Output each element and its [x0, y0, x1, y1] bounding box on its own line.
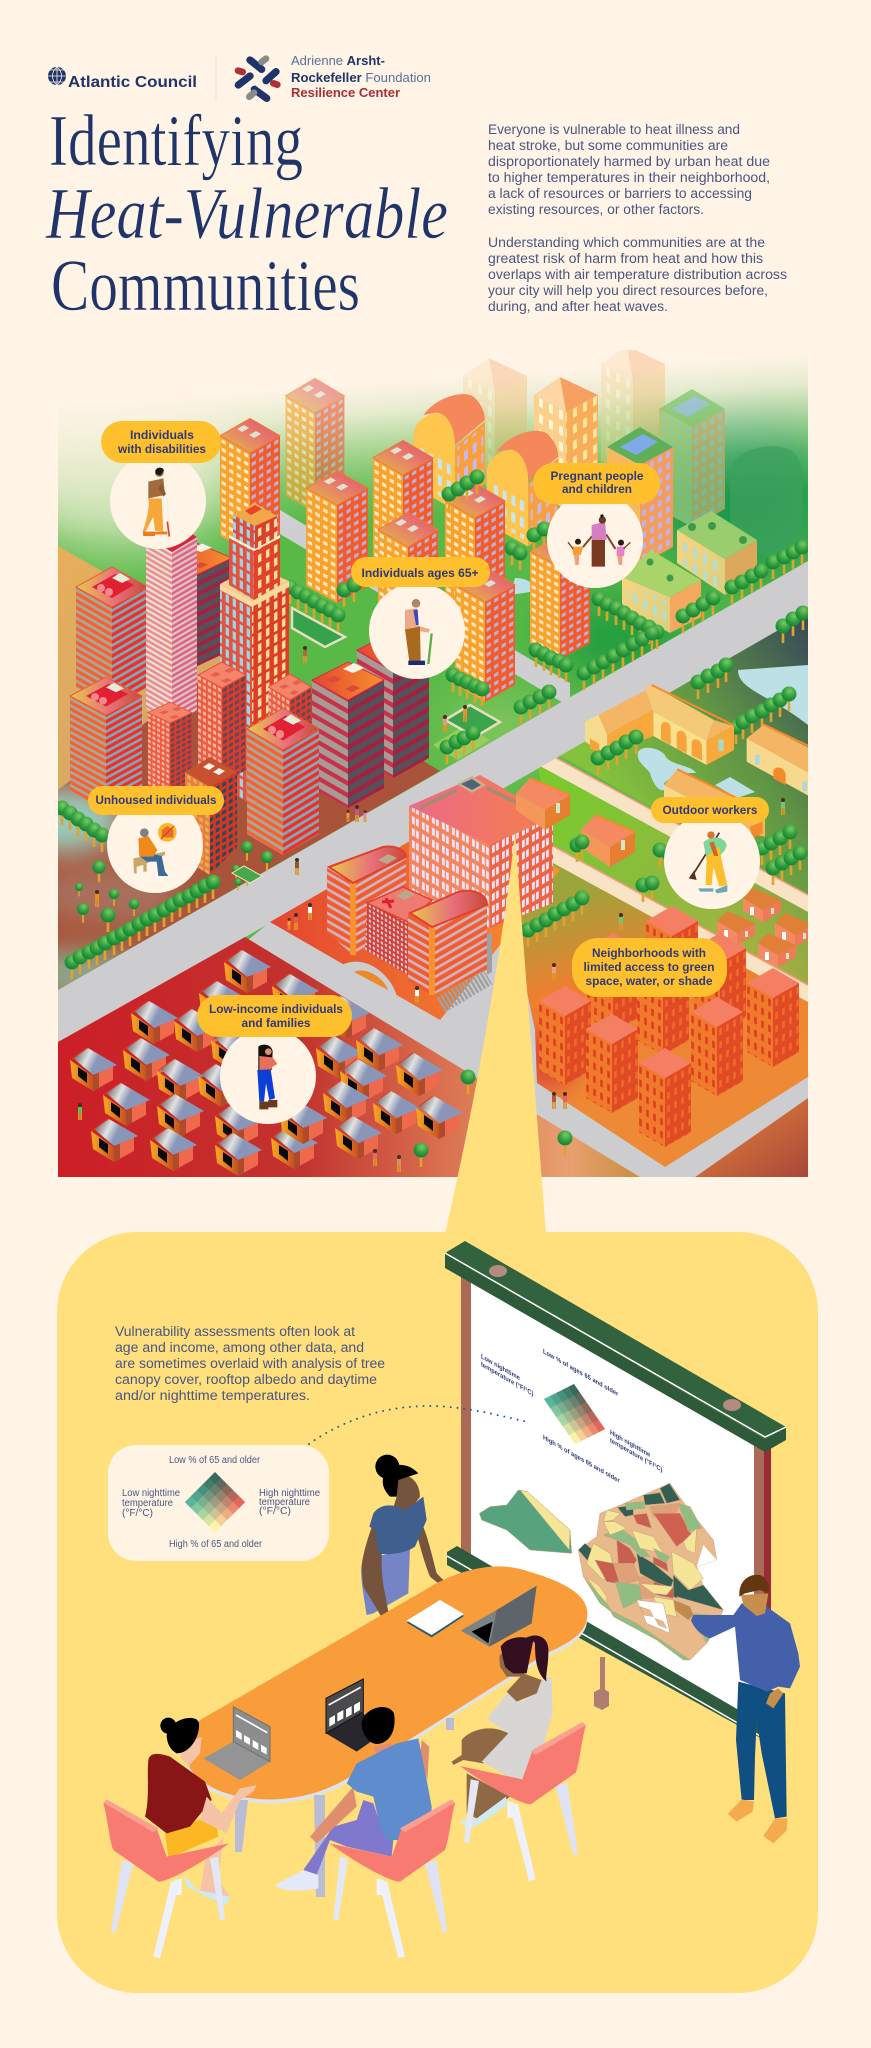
screen legend: temperature (°F/°C) — [481, 1360, 533, 1398]
legend card: temperature — [122, 1498, 173, 1509]
bottom right ground — [688, 1098, 808, 1177]
callout: low-income individuals and families: and families — [242, 1016, 311, 1030]
callout: limited access neighborhoods: space, water, or shade — [586, 974, 713, 988]
dotted connector — [309, 1406, 528, 1444]
laptop: grey — [203, 1707, 270, 1780]
legend card: (°F/°C) — [259, 1506, 291, 1517]
low-income block ground — [58, 937, 640, 1177]
projection screen — [445, 1241, 786, 1742]
table legs — [235, 1718, 454, 1897]
skyscraper — [220, 590, 252, 805]
screen base bar — [447, 1546, 768, 1742]
screen legend — [481, 1348, 662, 1485]
top bar front — [445, 1253, 786, 1452]
title: Communities — [51, 245, 360, 326]
green courtyard — [292, 608, 345, 647]
green block small — [433, 729, 490, 760]
hospital — [327, 775, 553, 1005]
apartment blocks — [460, 906, 799, 1155]
water — [510, 578, 808, 798]
screen rear leg — [594, 1657, 609, 1710]
back row buildings, hazed by distance — [286, 346, 803, 560]
legend card: High nighttime — [259, 1488, 320, 1499]
callout: low-income individuals and families — [197, 995, 352, 1124]
base bar highlight — [447, 1556, 762, 1737]
callout: unhoused individuals: Unhoused individuals — [96, 793, 217, 807]
intro text: Everyone is vulnerable to heat illness and — [488, 122, 740, 137]
callout: unhoused individuals — [88, 786, 224, 893]
screen maps — [479, 1483, 723, 1660]
intro text: to higher temperatures in their neighborhood, — [488, 170, 770, 185]
back street — [280, 510, 570, 707]
panel text: Vulnerability assessments often look at — [115, 1324, 355, 1339]
villas and houses — [516, 685, 813, 967]
right-of-road dark ground — [560, 618, 808, 894]
seated people, chairs and laptops — [103, 1586, 586, 1958]
logo: Arsht-Rockefeller Foundation Resilience Center — [216, 53, 431, 101]
figure: mother with two children — [568, 514, 630, 567]
tan ground left — [58, 546, 220, 790]
callout: limited access neighborhoods — [572, 938, 727, 997]
intro text: a lack of resources or barriers to accessing — [488, 186, 752, 201]
orange towers — [220, 418, 590, 702]
cream path lower — [553, 846, 808, 1002]
callout: pregnant people and children: and children — [562, 482, 632, 496]
logo: Atlantic Council — [48, 67, 197, 91]
panel text: age and income, among other data, and — [115, 1340, 364, 1355]
screen legend: High nighttime — [610, 1429, 650, 1459]
intro text: disproportionately harmed by urban heat due — [488, 154, 770, 169]
screen top bar — [445, 1241, 786, 1439]
cream path salmon edge — [556, 758, 808, 896]
hospital left wing — [327, 868, 350, 948]
conference table — [187, 1566, 587, 1897]
red striped towers and skyscraper — [70, 503, 429, 875]
logo: Atlantic Council: Atlantic Council — [68, 74, 197, 91]
figure: presenter pointing at map — [674, 1575, 800, 1843]
top bar highlight — [445, 1253, 786, 1437]
callout: limited access neighborhoods: Neighborhoods with — [592, 946, 706, 960]
callout: individuals with disabilities: with disabilities — [117, 442, 206, 456]
legend card: Low % of 65 and older — [169, 1455, 261, 1466]
callout: low-income individuals and families: Low-income individuals — [209, 1002, 343, 1016]
arched and peaked buildings — [413, 377, 673, 565]
laptop: dark — [326, 1679, 373, 1752]
legend card: temperature — [259, 1497, 310, 1508]
cream path upper — [538, 748, 808, 912]
title: Identifying — [49, 100, 303, 181]
screen legend: High % of ages 65 and older — [543, 1434, 620, 1485]
book — [407, 1600, 464, 1637]
figure: worker with broom — [689, 831, 727, 893]
hospital ground — [270, 812, 560, 1020]
screen legend: temperature (°F/°C) — [610, 1436, 662, 1474]
logo: Arsht-Rockefeller Foundation Resilience Center: Resilience Center — [291, 85, 400, 100]
panel text — [115, 1324, 385, 1403]
cream path lower edge — [553, 846, 808, 985]
legend card: Low nighttime — [122, 1488, 180, 1499]
callout: pregnant people and children: Pregnant people — [550, 469, 644, 483]
screen legend: Low nighttime — [481, 1353, 520, 1383]
panel: yellow meeting room — [57, 1232, 818, 1993]
intro text — [488, 122, 787, 314]
small people — [78, 646, 785, 1172]
legend card — [108, 1445, 329, 1561]
logo: Arsht-Rockefeller Foundation Resilience Center: Adrienne Arsht- — [291, 53, 385, 68]
green middle strip — [538, 765, 808, 1002]
fence — [441, 977, 488, 1005]
panel: isometric city map — [58, 350, 808, 1177]
intro text: Understanding which communities are at the — [488, 235, 765, 250]
panel text: canopy cover, rooftop albedo and daytime — [115, 1372, 377, 1387]
callout: individuals ages 65+ — [351, 557, 490, 679]
logo: Arsht-Rockefeller Foundation Resilience Center: Rockefeller Foundation — [291, 70, 431, 85]
panel text: and/or nighttime temperatures. — [115, 1388, 310, 1403]
figure: older man with cane — [405, 599, 432, 665]
green patches by towers — [232, 866, 262, 883]
red blotch — [520, 1030, 576, 1090]
roads — [58, 561, 808, 1182]
green-roof low flats — [622, 511, 757, 633]
seated man middle — [275, 1707, 455, 1958]
tree rows upper — [282, 470, 810, 764]
screen knobs — [489, 1265, 741, 1411]
callout pointer — [445, 832, 546, 1234]
main villa — [585, 685, 810, 843]
intro text: greatest risk of harm from heat and how this — [488, 251, 763, 266]
intro text: existing resources, or other factors. — [488, 202, 704, 217]
callout: outdoor workers: Outdoor workers — [662, 803, 758, 817]
intro text: during, and after heat waves. — [488, 299, 668, 314]
low-income shacks — [70, 950, 463, 1176]
tree rows lower — [54, 800, 273, 979]
callout: outdoor workers — [651, 797, 769, 909]
intro text: overlaps with air temperature distribution across — [488, 267, 787, 282]
title — [45, 100, 448, 326]
legend card: (°F/°C) — [122, 1508, 153, 1519]
courtyard path right — [445, 705, 500, 737]
figure: woman with phone — [257, 1045, 277, 1109]
figure: person with cane — [143, 468, 169, 537]
ground tints — [0, 390, 830, 760]
apartment ground — [500, 863, 808, 1167]
seated woman right — [452, 1635, 586, 1881]
panel text: are sometimes overlaid with analysis of tree — [115, 1356, 385, 1371]
figure: man on bench with no-home icon — [133, 823, 177, 876]
title: Heat-Vulnerable — [45, 173, 448, 254]
callout: individuals with disabilities — [101, 421, 221, 549]
hospital center wing — [365, 903, 408, 975]
figure: standing woman — [361, 1455, 450, 1622]
legend card: High % of 65 and older — [169, 1539, 263, 1550]
hospital right wing — [408, 913, 429, 994]
callout: pregnant people and children — [533, 463, 660, 588]
intro text: heat stroke, but some communities are — [488, 138, 728, 153]
callout: individuals ages 65+: Individuals ages 65+ — [362, 566, 478, 580]
hospital arch — [342, 962, 397, 997]
tower beside unhoused — [185, 772, 210, 875]
callout: limited access neighborhoods: limited access to green — [584, 960, 714, 974]
screen legend: Low % of ages 65 and older — [543, 1348, 619, 1398]
callout: individuals with disabilities: Individuals — [130, 428, 194, 442]
laptop: rear — [461, 1586, 537, 1647]
intro text: your city will help you direct resources before, — [488, 283, 768, 298]
fog over far ground — [58, 350, 808, 522]
brown ground under towers — [58, 682, 440, 990]
seated woman left — [103, 1718, 257, 1958]
